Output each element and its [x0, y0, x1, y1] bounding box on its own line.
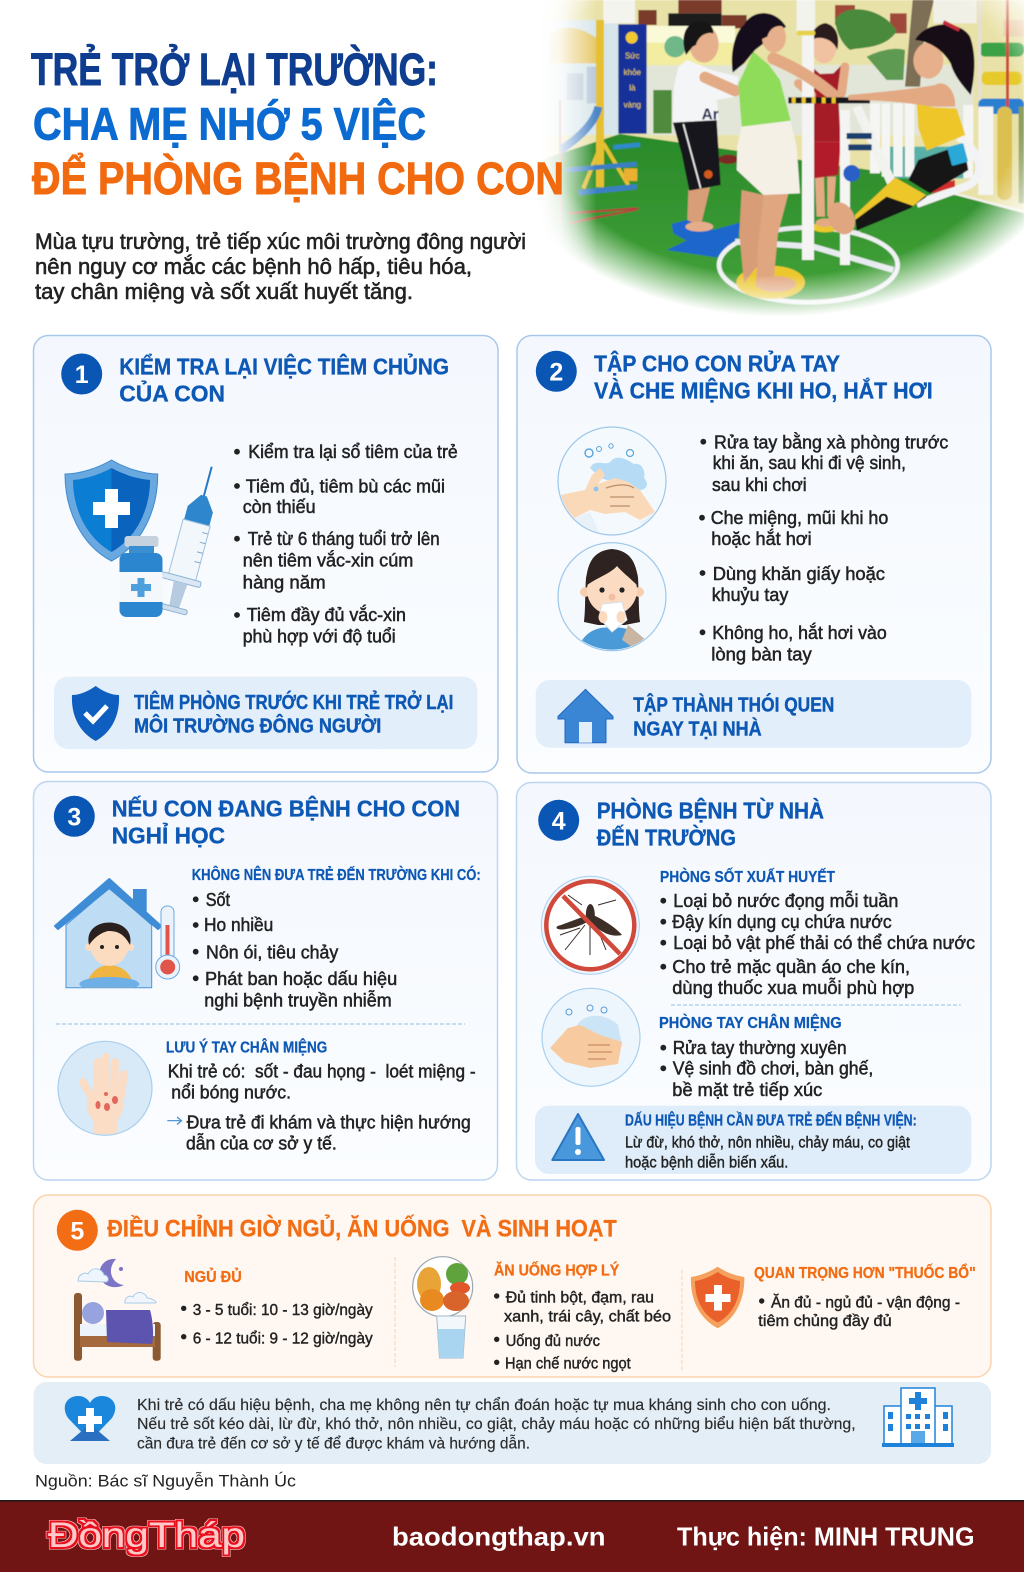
icon: heart with cross — [65, 1396, 115, 1441]
callout 4: Lừ đừ, khó thở, nôn nhiều, chảy máu, co giật — [625, 1134, 910, 1151]
note text: Nếu trẻ sốt kéo dài, lừ đừ, khó thở, nôn nhiều, co giật, chảy máu hoặc có những biểu hiện bất thường, — [137, 1415, 856, 1433]
callout 2: NGAY TẠI NHÀ — [633, 718, 762, 741]
icon: warning triangle — [552, 1114, 604, 1160]
healthy eating: Đủ tinh bột, đạm, rau — [506, 1289, 654, 1306]
healthy eating — [494, 1260, 671, 1372]
dengue prevention: Loại bỏ vật phế thải có thể chứa nước — [673, 932, 975, 953]
icon: sleeping child in bed — [74, 1259, 161, 1361]
photo: children playing at school: là — [629, 84, 636, 93]
credit: Thực hiện: MINH TRUNG — [677, 1522, 974, 1552]
heading 2: VÀ CHE MIỆNG KHI HO, HẮT HƠI — [594, 376, 933, 403]
healthy eating: Uống đủ nước — [506, 1333, 600, 1350]
bullet list 1: phù hợp với độ tuổi — [243, 625, 396, 646]
icon: no mosquito — [541, 876, 639, 974]
note: hand foot mouth disease: nổi bóng nước. — [171, 1081, 291, 1102]
icon: plate and glass of water — [413, 1257, 473, 1358]
title: ĐỂ PHÒNG BỆNH CHO CON — [32, 153, 564, 204]
heading 4: ĐẾN TRƯỜNG — [597, 823, 736, 850]
bullet list 3: Ho nhiều — [204, 914, 273, 935]
bullet list 1: Tiêm đầy đủ vắc-xin — [247, 604, 406, 625]
dengue prevention: dùng thuốc xua muỗi phù hợp — [672, 977, 914, 998]
bullet list 1: Kiểm tra lại sổ tiêm của trẻ — [248, 441, 458, 462]
icon: shield, vial and syringe — [65, 460, 231, 617]
note text — [137, 1396, 856, 1452]
dengue prevention — [660, 866, 975, 998]
logo: ĐồngTháp — [48, 1516, 245, 1555]
heading 1: CỦA CON — [119, 379, 225, 407]
heading 4 — [597, 797, 824, 850]
number badge 1 — [61, 354, 102, 394]
bullet list 2: Rửa tay bằng xà phòng trước — [714, 431, 948, 452]
note text: Khi trẻ có dấu hiệu bệnh, cha mẹ không nên tự chẩn đoán hoặc tự mua kháng sinh cho con uống. — [137, 1396, 831, 1414]
sleep enough: NGỦ ĐỦ — [184, 1267, 242, 1286]
bullet list 1: Tiêm đủ, tiêm bù các mũi — [246, 475, 445, 496]
more important than tonics: QUAN TRỌNG HƠN "THUỐC BỔ" — [754, 1262, 976, 1282]
healthy eating: Hạn chế nước ngọt — [505, 1355, 631, 1372]
more important than tonics — [754, 1262, 976, 1330]
hand foot mouth prevention: PHÒNG TAY CHÂN MIỆNG — [659, 1013, 842, 1032]
source: Nguồn: Bác sĩ Nguyễn Thành Úc — [35, 1472, 297, 1491]
icon: child covering mouth — [558, 543, 666, 655]
photo: children playing at school: Sức — [625, 51, 640, 60]
note text: cần đưa trẻ đến cơ sở y tế để được khám và hướng dẫn. — [137, 1433, 530, 1452]
icon: house — [558, 689, 613, 743]
callout 4 — [535, 1106, 971, 1174]
heading 3: NGHỈ HỌC — [112, 820, 225, 848]
dengue prevention: Loại bỏ nước đọng mỗi tuần — [673, 890, 898, 911]
number badge 3: 3 — [67, 803, 81, 831]
bullet list 2: Dùng khăn giấy hoặc — [713, 563, 885, 584]
dengue prevention: Đậy kín dụng cụ chứa nước — [672, 911, 892, 932]
panel: 2 hand washing — [517, 336, 991, 773]
note: hand foot mouth disease: Khi trẻ có: sốt - đau họng - loét miệng - — [168, 1060, 476, 1081]
intro text — [35, 229, 526, 304]
photo: children playing at school: khỏe — [624, 68, 642, 77]
note: hand foot mouth disease — [166, 1037, 476, 1153]
number badge 4 — [538, 800, 579, 841]
bullet list 2: khuỷu tay — [712, 584, 789, 605]
callout 2: TẬP THÀNH THÓI QUEN — [633, 693, 834, 717]
callout 4: hoặc bệnh diễn biến xấu. — [625, 1152, 788, 1171]
heading 5: ĐIỀU CHỈNH GIỜ NGỦ, ĂN UỐNG VÀ SINH HOẠT — [107, 1214, 617, 1243]
heading 1: KIỂM TRA LẠI VIỆC TIÊM CHỦNG — [119, 351, 449, 379]
bullet list 2: sau khi chơi — [712, 474, 807, 495]
icon: orange shield — [691, 1267, 744, 1328]
bullet list 1: còn thiếu — [243, 496, 316, 517]
bullet list 2: lòng bàn tay — [711, 643, 812, 664]
icon: hand with rash — [58, 1041, 152, 1135]
more important than tonics: Ăn đủ - ngủ đủ - vận động - — [771, 1292, 960, 1311]
callout 1 — [54, 677, 477, 749]
icon: washing hands 2 — [542, 988, 640, 1086]
bullet list 2: Che miệng, mũi khi ho — [711, 507, 888, 528]
photo: children playing at school — [540, 0, 1024, 325]
photo: children playing at school: Ar — [702, 106, 719, 123]
photo: children playing at school: vàng — [624, 100, 641, 109]
heading 3 — [112, 795, 460, 848]
intro text: tay chân miệng và sốt xuất huyết tăng. — [35, 279, 413, 304]
bullet list 1: nên tiêm vắc-xin cúm — [243, 549, 413, 570]
note bar — [34, 1382, 991, 1464]
title: CHA MẸ NHỚ 5 VIỆC — [33, 98, 426, 150]
icon: washing hands — [556, 427, 668, 535]
bullet list 2: khi ăn, sau khi đi vệ sinh, — [713, 452, 906, 473]
callout 1: TIÊM PHÒNG TRƯỚC KHI TRẺ TRỞ LẠI — [134, 690, 453, 714]
number badge 2 — [536, 351, 577, 392]
callout 1: MÔI TRƯỜNG ĐÔNG NGƯỜI — [134, 714, 381, 738]
note: hand foot mouth disease: LƯU Ý TAY CHÂN MIỆNG — [166, 1037, 327, 1056]
heading 4: PHÒNG BỆNH TỪ NHÀ — [597, 797, 824, 824]
bullet list 3: Phát ban hoặc dấu hiệu — [205, 968, 397, 989]
number badge 2: 2 — [549, 358, 563, 386]
icon: check shield — [72, 686, 119, 741]
healthy eating: xanh, trái cây, chất béo — [504, 1309, 671, 1326]
number badge 4: 4 — [552, 807, 566, 835]
title: TRẺ TRỞ LẠI TRƯỜNG: — [31, 44, 438, 95]
bullet list 2 — [699, 431, 948, 664]
note: hand foot mouth disease: dẫn của cơ sở y tế. — [186, 1132, 337, 1153]
panel: 3 sick child stays home — [34, 782, 498, 1180]
bullet list 2: Không ho, hắt hơi vào — [712, 622, 887, 643]
callout 4: DẤU HIỆU BỆNH CẦN ĐƯA TRẺ ĐẾN BỆNH VIỆN: — [625, 1110, 917, 1129]
number badge 5: 5 — [70, 1217, 84, 1245]
sleep enough: 6 - 12 tuổi: 9 - 12 giờ/ngày — [193, 1329, 373, 1347]
panel: 1 vaccination check — [34, 336, 498, 772]
heading 2: TẬP CHO CON RỬA TAY — [594, 348, 840, 376]
heading 3: NẾU CON ĐANG BỆNH CHO CON — [112, 795, 460, 822]
dengue prevention: PHÒNG SỐT XUẤT HUYẾT — [660, 866, 835, 886]
heading 2 — [594, 348, 933, 403]
sub-heading: do not send to school: KHÔNG NÊN ĐƯA TRẺ ĐẾN TRƯỜNG KHI CÓ: — [192, 865, 481, 884]
title — [31, 44, 564, 204]
hand foot mouth prevention: bề mặt trẻ tiếp xúc — [672, 1079, 822, 1100]
panel: 5 sleep and diet — [34, 1195, 991, 1377]
hand foot mouth prevention — [659, 1013, 873, 1100]
number badge 3 — [54, 796, 95, 837]
hand foot mouth prevention: Vệ sinh đồ chơi, bàn ghế, — [673, 1058, 873, 1079]
bullet list 3: Nôn ói, tiêu chảy — [206, 941, 339, 962]
panel: 4 prevention from home to school — [516, 782, 991, 1180]
bullet list 3 — [193, 889, 397, 1010]
healthy eating: ĂN UỐNG HỢP LÝ — [494, 1260, 620, 1280]
dengue prevention: Cho trẻ mặc quần áo che kín, — [672, 956, 910, 977]
more important than tonics: tiêm chủng đầy đủ — [758, 1313, 892, 1330]
icon: hospital — [882, 1388, 954, 1447]
website: baodongthap.vn — [392, 1522, 606, 1552]
number badge 1: 1 — [75, 361, 89, 389]
heading 1 — [119, 351, 449, 407]
bullet list 1: hàng năm — [243, 571, 326, 592]
icon: child at home with thermometer — [55, 879, 180, 991]
sleep enough — [181, 1267, 373, 1347]
bullet list 3: Sốt — [206, 889, 230, 910]
bullet list 1: Trẻ từ 6 tháng tuổi trở lên — [248, 528, 440, 549]
note: hand foot mouth disease: Đưa trẻ đi khám và thực hiện hướng — [187, 1111, 471, 1132]
intro text: Mùa tựu trường, trẻ tiếp xúc môi trường đông người — [35, 229, 526, 254]
callout 2 — [536, 680, 971, 748]
hand foot mouth prevention: Rửa tay thường xuyên — [673, 1037, 847, 1058]
footer bar — [0, 1500, 1024, 1572]
bullet list 1 — [234, 441, 458, 646]
sleep enough: 3 - 5 tuổi: 10 - 13 giờ/ngày — [193, 1301, 373, 1319]
intro text: nên nguy cơ mắc các bệnh hô hấp, tiêu hóa, — [35, 254, 472, 279]
bullet list 3: nghi bệnh truyền nhiễm — [204, 989, 392, 1010]
number badge 5 — [57, 1210, 98, 1251]
bullet list 2: hoặc hắt hơi — [711, 528, 812, 549]
